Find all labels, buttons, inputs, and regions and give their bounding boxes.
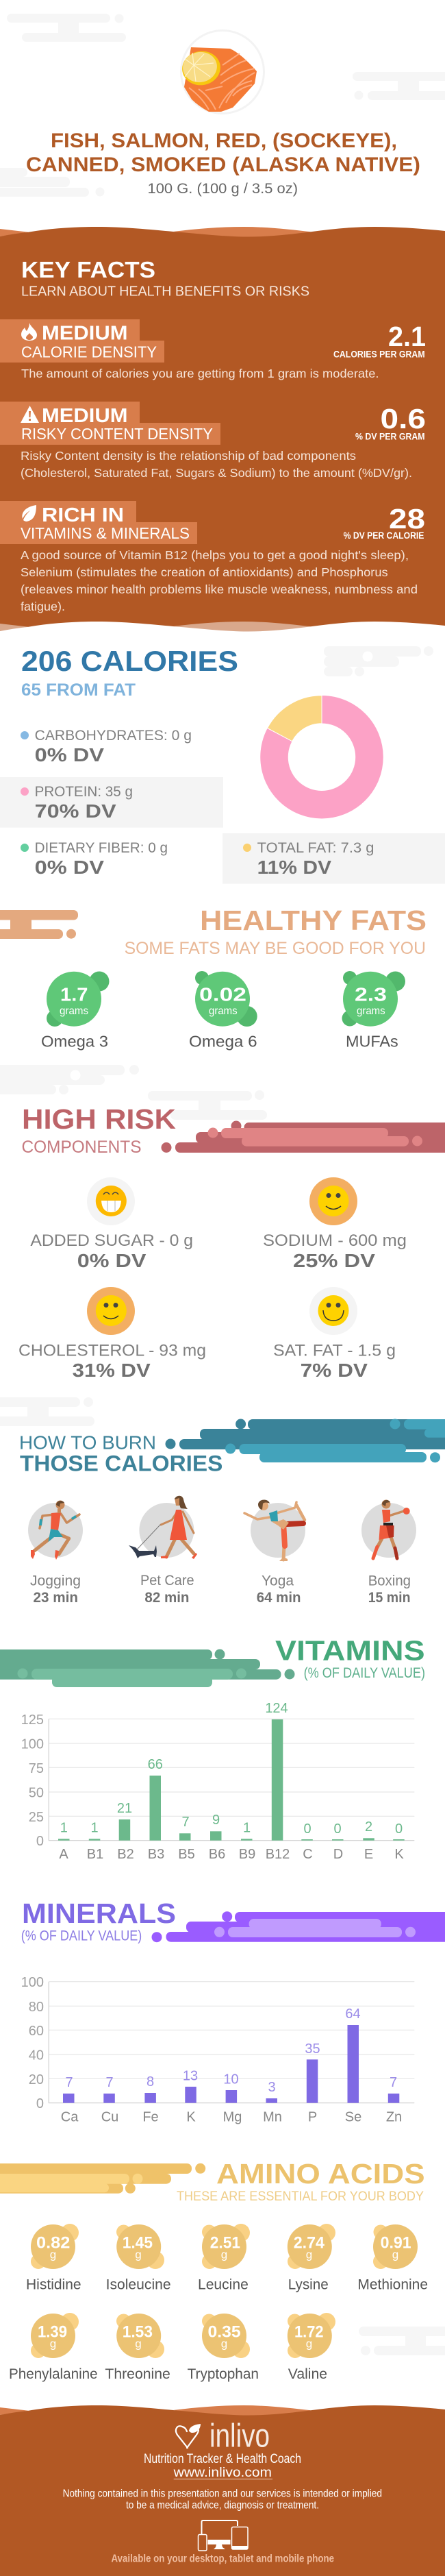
bar chart: minerals: 100: [21, 1975, 44, 1990]
bar chart: minerals: Mn: [263, 2110, 282, 2125]
activity: jogging: Jogging: [30, 1573, 81, 1588]
decorative banner: high risk: [162, 1121, 445, 1153]
bar chart: minerals: P: [308, 2110, 317, 2125]
amino: leucine: [198, 2224, 250, 2293]
activity: jogging: [28, 1501, 83, 1606]
amino: valine: [288, 2313, 335, 2382]
heading: vitamins: VITAMINS: [275, 1635, 425, 1667]
food photo: salmon with lemon: [179, 30, 264, 114]
bar chart: minerals: Cu: [101, 2110, 118, 2125]
bar chart: minerals: K: [186, 2110, 196, 2125]
amino: histidine: 0.82: [36, 2234, 70, 2253]
item: added sugar: 0% DV: [77, 1250, 147, 1271]
amino: phenylalanine: 1.39: [38, 2323, 67, 2342]
amino: tryptophan: Tryptophan: [188, 2366, 259, 2382]
amino: tryptophan: 0.35: [208, 2323, 241, 2342]
badge: omega 3: grams: [60, 1005, 88, 1017]
bar chart: vitamins: 0: [36, 1834, 44, 1849]
amino: leucine: 2.51: [210, 2234, 240, 2253]
tagline: Nutrition Tracker & Health Coach: [144, 2452, 301, 2466]
item: saturated fat: SAT. FAT - 1.5 g: [273, 1341, 396, 1360]
amino: lysine: [288, 2224, 335, 2293]
heading: how to burn: HOW TO BURN: [19, 1432, 156, 1453]
bar chart: vitamins: 50: [29, 1786, 44, 1801]
logo: inlivo: inlivo: [209, 2418, 270, 2455]
amino: threonine: 1.53: [123, 2323, 153, 2342]
amino: leucine: Leucine: [198, 2277, 249, 2293]
fact: rich in vitamins and minerals: 28: [389, 503, 425, 535]
fact: rich in vitamins and minerals: VITAMINS & MINERALS: [21, 524, 190, 542]
bar chart: vitamins: 124: [265, 1701, 288, 1716]
fact: risky content density: [0, 402, 426, 480]
badge: omega 3: 1.7: [60, 984, 88, 1005]
amino: histidine: [26, 2224, 81, 2293]
bar chart: minerals: Zn: [386, 2110, 402, 2125]
legend: protein: [0, 777, 223, 828]
amino: valine: Valine: [288, 2366, 327, 2382]
bar chart: vitamins: B2: [117, 1847, 134, 1862]
title: [26, 130, 420, 176]
fact: rich in vitamins and minerals: fatigue).: [21, 600, 65, 613]
amino: isoleucine: Isoleucine: [106, 2277, 171, 2293]
bar chart: vitamins: [21, 1701, 414, 1862]
item: cholesterol: CHOLESTEROL - 93 mg: [18, 1341, 206, 1360]
bar chart: vitamins: 25: [29, 1810, 44, 1825]
activity: pet care: 82 min: [144, 1590, 189, 1606]
logo: inlivo: [176, 2418, 270, 2455]
amino: threonine: [105, 2314, 170, 2382]
bar chart: minerals: 8: [147, 2074, 154, 2089]
bar chart: vitamins: A: [59, 1847, 68, 1862]
fact: calorie density: The amount of calories you are getting from 1 gram is moderate.: [21, 367, 379, 380]
decorative banner: amino acids: [0, 2163, 205, 2194]
amino: valine: g: [306, 2338, 312, 2351]
website link: www.inlivo.com: [173, 2466, 272, 2480]
amino: methionine: Methionine: [357, 2277, 428, 2293]
subheading: calories from fat: 65 FROM FAT: [21, 681, 136, 700]
heading: amino acids: AMINO ACIDS: [216, 2158, 425, 2189]
fact: rich in vitamins and minerals: RICH IN: [42, 504, 124, 526]
activity: yoga: [244, 1499, 305, 1606]
heading: minerals: MINERALS: [22, 1898, 176, 1929]
item: added sugar: [30, 1177, 193, 1271]
bar chart: minerals: 80: [29, 2000, 44, 2015]
bar chart: minerals: 7: [65, 2075, 73, 2090]
bar chart: minerals: Ca: [61, 2110, 79, 2125]
bar chart: vitamins: D: [333, 1847, 343, 1862]
bar chart: minerals: 13: [183, 2069, 198, 2084]
bar chart: minerals: 3: [268, 2080, 276, 2095]
bar chart: vitamins: 75: [29, 1761, 44, 1776]
amino: isoleucine: 1.45: [123, 2234, 153, 2253]
badge: omega 6: 0.02: [199, 984, 246, 1005]
bar chart: vitamins: 0: [395, 1821, 403, 1837]
legend: carbohydrates: [21, 728, 192, 765]
legend: protein: PROTEIN: 35 g: [35, 784, 133, 800]
bar chart: vitamins: 1: [243, 1820, 251, 1835]
amino: histidine: g: [50, 2248, 56, 2261]
badge: omega 6: Omega 6: [189, 1033, 257, 1051]
fact: calorie density: 2.1: [388, 321, 426, 352]
bar chart: minerals: Mg: [223, 2110, 242, 2125]
serving size: 100 G. (100 g / 3.5 oz): [148, 181, 298, 197]
panel: amino acids: [0, 2158, 428, 2382]
panel: minerals: [21, 1898, 445, 2125]
bar chart: minerals: 0: [36, 2096, 44, 2111]
legend: total fat: [222, 833, 445, 884]
activity: yoga: 64 min: [257, 1590, 301, 1606]
decorative banner: minerals: [152, 1911, 445, 1942]
panel: healthy fats: [0, 905, 427, 1051]
disclaimer: [63, 2488, 382, 2512]
title: FISH, SALMON, RED, (SOCKEYE),: [51, 130, 397, 152]
legend: dietary fiber: [21, 840, 168, 878]
legend: total fat: TOTAL FAT: 7.3 g: [257, 840, 374, 856]
panel: key facts: [0, 227, 445, 641]
activity: pet care: Pet Care: [140, 1573, 194, 1588]
amino: leucine: g: [221, 2248, 227, 2261]
item: saturated fat: 7% DV: [301, 1360, 368, 1381]
fact: rich in vitamins and minerals: [0, 501, 425, 613]
amino: phenylalanine: g: [50, 2338, 56, 2351]
fact: rich in vitamins and minerals: Selenium (stimulates the creation of antioxidants) and Phosphorus: [21, 565, 388, 579]
item: saturated fat: [273, 1287, 396, 1381]
bar chart: vitamins: 125: [21, 1713, 44, 1728]
amino: histidine: Histidine: [26, 2277, 81, 2293]
fact: risky content density: (Cholesterol, Saturated Fat, Sugars & Sodium) to the amount (%DV/gr).: [21, 466, 412, 480]
amino: methionine: 0.91: [381, 2234, 411, 2253]
fact: risky content density: Risky Content density is the relationship of bad components: [21, 449, 356, 463]
bar chart: vitamins: 1: [90, 1820, 99, 1835]
amino: isoleucine: g: [135, 2248, 142, 2261]
bar chart: minerals: 7: [105, 2075, 114, 2090]
heading: key facts: KEY FACTS: [21, 257, 155, 282]
heading: those calories: THOSE CALORIES: [20, 1451, 222, 1476]
amino: phenylalanine: [9, 2313, 98, 2382]
item: sodium: SODIUM - 600 mg: [263, 1231, 407, 1250]
bar chart: vitamins: B5: [178, 1847, 195, 1862]
bar chart: vitamins: 7: [181, 1815, 190, 1830]
legend: dietary fiber: DIETARY FIBER: 0 g: [35, 840, 168, 856]
bar chart: minerals: 20: [29, 2072, 44, 2087]
heading: healthy fats: HEALTHY FATS: [200, 905, 427, 936]
amino: isoleucine: [106, 2224, 171, 2293]
panel: footer: [0, 2405, 445, 2576]
bar chart: vitamins: C: [303, 1847, 313, 1862]
amino: valine: 1.72: [294, 2323, 324, 2342]
bar chart: minerals: Fe: [142, 2110, 159, 2125]
amino: lysine: 2.74: [294, 2234, 325, 2253]
icon: leaf: [22, 505, 36, 522]
amino: lysine: g: [306, 2248, 312, 2261]
bar chart: minerals: [21, 1975, 414, 2125]
availability note: Available on your desktop, tablet and mobile phone: [111, 2553, 334, 2565]
activity: jogging: 23 min: [33, 1590, 78, 1606]
amino: tryptophan: g: [221, 2338, 227, 2351]
item: added sugar: ADDED SUGAR - 0 g: [30, 1231, 193, 1250]
subheading: THESE ARE ESSENTIAL FOR YOUR BODY: [177, 2189, 424, 2204]
disclaimer: Nothing contained in this presentation and our services is intended or implied: [63, 2488, 382, 2499]
icon: devices: [199, 2520, 248, 2551]
bar chart: vitamins: K: [394, 1847, 404, 1862]
bar chart: minerals: Se: [345, 2110, 361, 2125]
bar chart: minerals: 60: [29, 2024, 44, 2039]
badge: MUFAs: grams: [357, 1005, 385, 1017]
subheading: (% OF DAILY VALUE): [21, 1928, 142, 1944]
decorative banner: vitamins: [0, 1649, 294, 1687]
bar chart: vitamins: 0: [303, 1821, 312, 1837]
badge: MUFAs: MUFAs: [346, 1033, 398, 1051]
bar chart: minerals: 64: [345, 2007, 361, 2022]
bar chart: vitamins: B3: [148, 1847, 164, 1862]
bar chart: vitamins: 1: [60, 1820, 68, 1835]
bar chart: vitamins: B12: [266, 1847, 290, 1862]
legend: dietary fiber: 0% DV: [35, 857, 104, 878]
bar chart: minerals: 35: [305, 2041, 320, 2057]
subheading: SOME FATS MAY BE GOOD FOR YOU: [125, 939, 426, 958]
fact: calorie density: [0, 319, 426, 380]
badge: omega 6: grams: [209, 1005, 238, 1017]
legend: carbohydrates: 0% DV: [35, 744, 104, 765]
heading: calories: 206 CALORIES: [21, 645, 238, 677]
amino: tryptophan: [188, 2314, 259, 2382]
fact: rich in vitamins and minerals: % DV PER CALORIE: [344, 530, 424, 541]
activity: boxing: Boxing: [368, 1573, 411, 1588]
panel: high risk components: [18, 1103, 445, 1381]
badge: omega 3: Omega 3: [41, 1033, 108, 1051]
item: sodium: [263, 1177, 407, 1271]
bar chart: vitamins: B9: [239, 1847, 255, 1862]
bar chart: minerals: 40: [29, 2048, 44, 2063]
fact: calorie density: MEDIUM: [42, 323, 127, 345]
bar chart: vitamins: B6: [209, 1847, 225, 1862]
bar chart: vitamins: 9: [212, 1813, 220, 1828]
donut chart: [267, 696, 370, 805]
decorative banner: burn: [166, 1419, 445, 1462]
activity: yoga: Yoga: [262, 1573, 294, 1588]
icon: warning triangle: [21, 406, 39, 423]
bar chart: minerals: 10: [223, 2072, 239, 2087]
panel: vitamins: [0, 1635, 425, 1862]
bar chart: vitamins: 100: [21, 1737, 44, 1752]
heading: high risk: HIGH RISK: [22, 1103, 176, 1135]
legend: protein: 70% DV: [35, 800, 116, 822]
activity: boxing: 15 min: [368, 1590, 411, 1606]
item: cholesterol: 31% DV: [73, 1360, 151, 1381]
badge: omega 3: [41, 972, 110, 1051]
bar chart: vitamins: 21: [117, 1801, 132, 1816]
amino: threonine: Threonine: [105, 2366, 170, 2382]
amino: methionine: g: [392, 2248, 398, 2261]
fact: calorie density: CALORIE DENSITY: [21, 343, 157, 360]
badge: MUFAs: 2.3: [355, 984, 387, 1005]
bar chart: minerals: 7: [390, 2075, 397, 2090]
panel: how to burn those calories: [19, 1419, 445, 1606]
legend: carbohydrates: CARBOHYDRATES: 0 g: [35, 728, 192, 744]
bar chart: vitamins: B1: [87, 1847, 103, 1862]
activity: boxing: [361, 1499, 416, 1606]
bar chart: vitamins: 0: [333, 1821, 342, 1837]
amino: lysine: Lysine: [288, 2277, 329, 2293]
fact: risky content density: 0.6: [381, 403, 426, 434]
amino: phenylalanine: Phenylalanine: [9, 2366, 98, 2382]
fact: rich in vitamins and minerals: (releaves minor health problems like muscle weakness, numbness and: [21, 582, 418, 596]
badge: MUFAs: [342, 971, 405, 1051]
amino: methionine: [357, 2224, 428, 2293]
bar chart: vitamins: 2: [365, 1819, 372, 1835]
item: cholesterol: [18, 1287, 206, 1381]
subheading: LEARN ABOUT HEALTH BENEFITS OR RISKS: [21, 284, 309, 299]
fact: risky content density: RISKY CONTENT DENSITY: [21, 425, 213, 443]
amino: threonine: g: [135, 2338, 142, 2351]
disclaimer: to be a medical advice, diagnosis or treatment.: [126, 2500, 319, 2512]
legend: total fat: 11% DV: [257, 857, 331, 878]
activity: pet care: [129, 1496, 197, 1606]
fact: risky content density: % DV PER GRAM: [355, 431, 425, 441]
fact: rich in vitamins and minerals: A good source of Vitamin B12 (helps you to get a good night's sleep),: [21, 548, 409, 562]
subheading: (% OF DAILY VALUE): [304, 1665, 425, 1681]
bar chart: vitamins: 66: [148, 1757, 163, 1772]
title: CANNED, SMOKED (ALASKA NATIVE): [26, 154, 420, 176]
item: sodium: 25% DV: [293, 1250, 375, 1271]
fact: calorie density: CALORIES PER GRAM: [333, 349, 425, 359]
fact: risky content density: MEDIUM: [42, 405, 127, 427]
bar chart: vitamins: E: [364, 1847, 373, 1862]
icon: flame: [21, 323, 37, 341]
subheading: components: COMPONENTS: [22, 1138, 141, 1157]
badge: omega 6: [189, 971, 257, 1051]
